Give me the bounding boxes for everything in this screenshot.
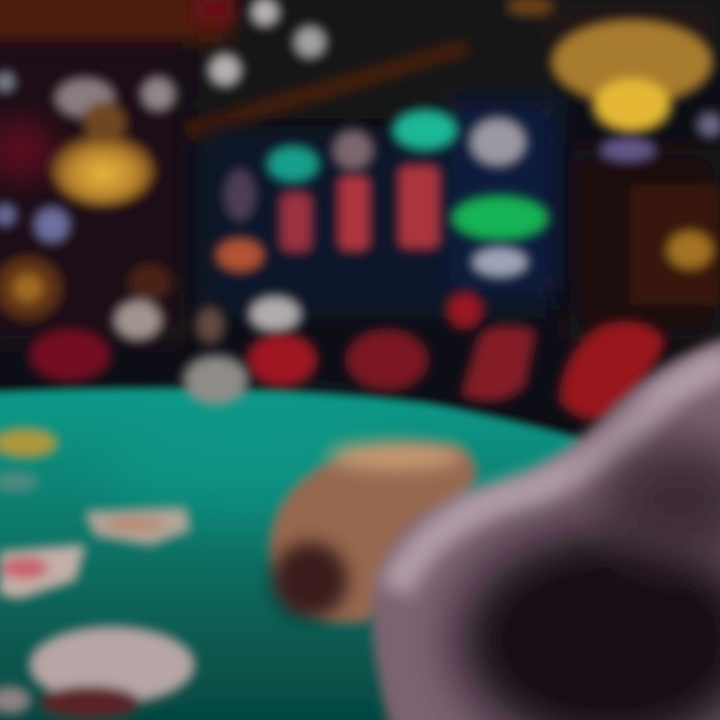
- chandelier left: [51, 102, 155, 206]
- small figure on table edge: [184, 356, 248, 404]
- central slot machine screens: [205, 100, 555, 310]
- ceiling lights: [0, 0, 720, 243]
- chandelier right: [506, 0, 712, 162]
- sleeve arm: [372, 335, 720, 720]
- crowd and mid-ground details: [0, 185, 720, 343]
- green card table: [0, 390, 600, 720]
- hand: [270, 442, 476, 622]
- cards on table: [0, 429, 194, 718]
- red casino chairs: [30, 322, 665, 420]
